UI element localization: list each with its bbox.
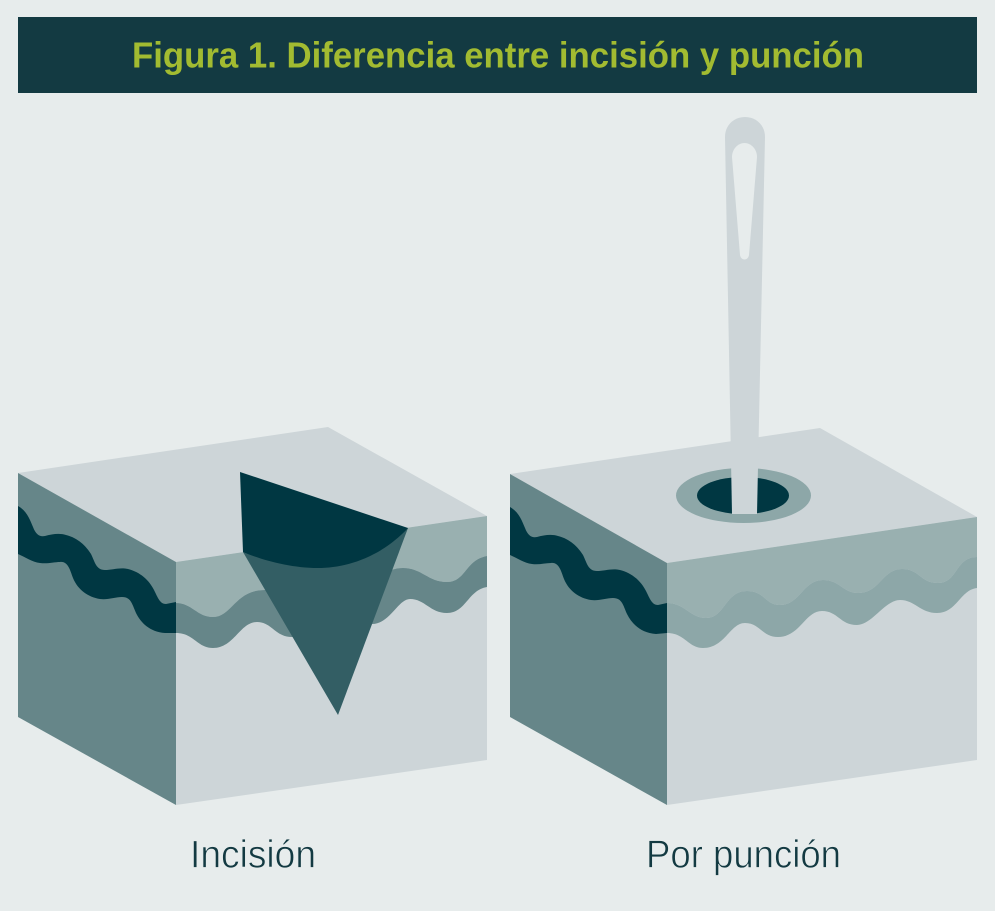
incision opening <box>240 472 408 568</box>
right face <box>667 517 977 805</box>
puncture hole <box>697 477 789 514</box>
wavy layer on right face <box>667 557 977 648</box>
wavy layer on right face <box>176 556 487 648</box>
panel: incision skin block <box>18 427 487 805</box>
caption: puncture: Por punción <box>646 834 841 876</box>
right face <box>176 516 487 805</box>
needle eye <box>732 143 757 260</box>
title banner <box>18 17 977 93</box>
panel: puncture skin block <box>510 428 977 805</box>
icon: needle <box>725 117 765 514</box>
left face <box>510 474 667 805</box>
upper skin layer <box>667 517 977 618</box>
top face <box>510 428 977 563</box>
puncture ring <box>676 468 811 523</box>
dark wavy layer on left face <box>18 506 176 633</box>
left face <box>18 473 176 805</box>
dark wavy layer on left face <box>510 507 667 634</box>
title: Figura 1. Diferencia entre incisión y punción <box>132 34 864 76</box>
incision cut wall <box>243 528 408 715</box>
top face <box>18 427 487 562</box>
caption: incision: Incisión <box>190 834 316 876</box>
upper skin layer <box>176 516 487 617</box>
